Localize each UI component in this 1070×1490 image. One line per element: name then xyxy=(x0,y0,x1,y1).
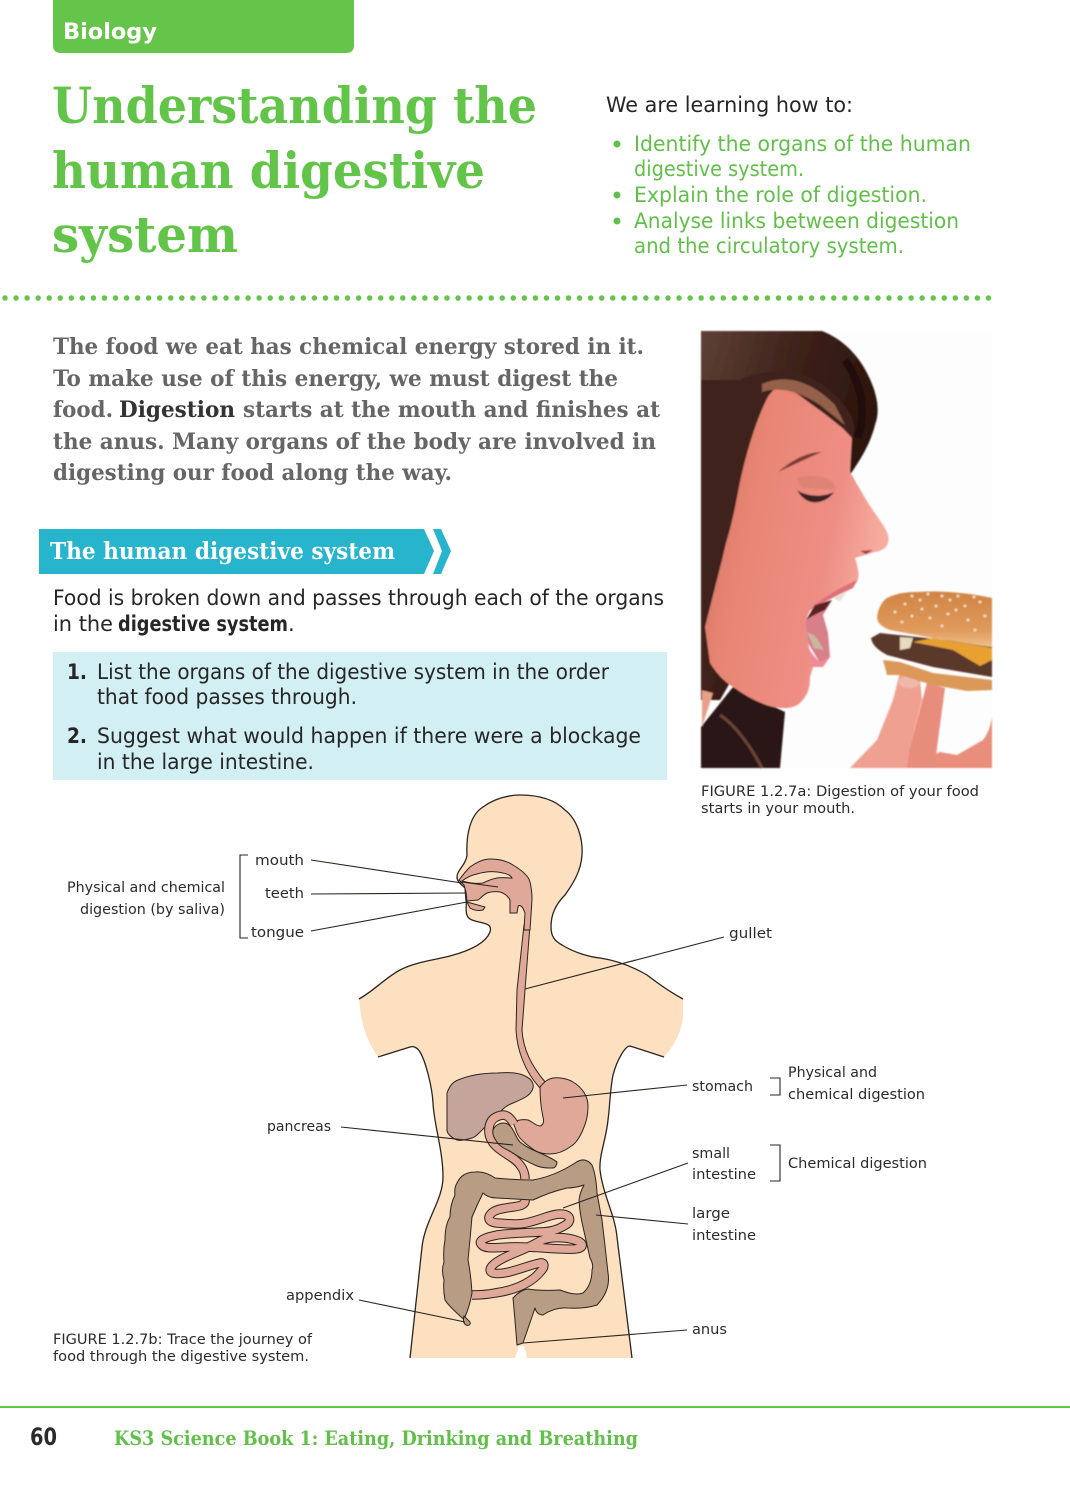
diagram labels: small xyxy=(692,1146,730,1162)
intro text block: digesting our food along the way. xyxy=(53,460,452,486)
stomach xyxy=(513,1078,588,1154)
tab: Biology: Biology xyxy=(63,20,157,45)
learning objectives: Identify the organs of the human xyxy=(634,132,971,156)
digestive system diagram xyxy=(67,795,927,1358)
gullet xyxy=(516,925,546,1088)
diagram labels: Physical and chemical xyxy=(67,880,225,896)
caption: figure a: FIGURE 1.2.7a: Digestion of your food xyxy=(701,784,979,800)
diagram labels: stomach xyxy=(692,1079,753,1095)
diagram labels: Physical and xyxy=(788,1065,877,1081)
diagram labels: Chemical digestion xyxy=(788,1156,927,1172)
leader lines xyxy=(240,855,780,1343)
index finger xyxy=(850,672,922,768)
title: Understanding the xyxy=(52,76,537,135)
intro text block xyxy=(53,334,661,486)
learning objectives xyxy=(606,93,971,258)
intro text block: the anus. Many organs of the body are involved in xyxy=(53,429,656,455)
back hair xyxy=(701,331,878,700)
caption: figure a xyxy=(701,784,979,817)
second finger xyxy=(905,683,945,768)
diagram labels: intestine xyxy=(692,1228,756,1244)
diagram labels xyxy=(67,853,927,1338)
section banner xyxy=(39,529,451,574)
small intestine xyxy=(472,1199,582,1295)
pancreas xyxy=(493,1123,557,1168)
brow xyxy=(778,452,822,472)
questions box: 2. xyxy=(67,724,87,748)
body outline xyxy=(359,795,683,1358)
neck xyxy=(702,690,713,727)
footer: KS3 Science Book 1: Eating, Drinking and Breathing xyxy=(114,1426,638,1450)
caption: figure b: FIGURE 1.2.7b: Trace the journey of xyxy=(53,1332,313,1348)
burger patty xyxy=(871,633,992,677)
nostril xyxy=(860,550,873,554)
tab: Biology xyxy=(53,0,354,53)
body xyxy=(359,795,683,1358)
intro text block: food. xyxy=(53,397,113,423)
learning objectives: and the circulatory system. xyxy=(634,234,904,258)
intro text block: starts at the mouth and finishes at xyxy=(243,397,661,423)
intro text block: The food we eat has chemical energy stored in it. xyxy=(53,334,644,360)
footer xyxy=(0,1406,1070,1451)
paragraph xyxy=(53,586,664,636)
diagram labels: intestine xyxy=(692,1167,756,1183)
caption: figure b xyxy=(53,1332,313,1365)
diagram labels: chemical digestion xyxy=(788,1087,925,1103)
hair strip beside face xyxy=(701,372,854,693)
sesame xyxy=(894,593,986,631)
learning objectives: We are learning how to: xyxy=(606,93,853,117)
nasal passage xyxy=(462,872,512,883)
teeth xyxy=(833,592,847,601)
diagram labels: mouth xyxy=(255,853,304,869)
diagram labels: pancreas xyxy=(267,1119,331,1135)
cheese xyxy=(913,638,992,666)
paragraph: in the xyxy=(53,612,113,636)
caption: figure b: food through the digestive system. xyxy=(53,1349,309,1365)
third finger and palm xyxy=(905,717,992,768)
appendix xyxy=(463,1316,470,1325)
fingernail xyxy=(898,676,920,688)
questions box: Suggest what would happen if there were a blockage xyxy=(97,724,641,748)
hair highlight xyxy=(762,379,845,425)
questions box: 1. xyxy=(67,660,87,684)
large intestine xyxy=(442,1160,609,1345)
tongue line xyxy=(462,882,498,887)
title: system xyxy=(52,205,238,264)
intro text block: Digestion xyxy=(119,397,235,423)
lower hair xyxy=(701,687,785,768)
liver xyxy=(447,1073,533,1140)
diagram labels: tongue xyxy=(251,925,304,941)
duodenum xyxy=(489,1115,525,1179)
burger bottom bun xyxy=(883,660,992,691)
paragraph: Food is broken down and passes through each of the organs xyxy=(53,586,664,610)
lower lobe xyxy=(467,902,485,910)
eye xyxy=(797,490,834,502)
diagram labels: gullet xyxy=(729,926,772,942)
learning objectives: Analyse links between digestion xyxy=(634,209,959,233)
learning objectives: digestive system. xyxy=(634,157,804,181)
diagram labels: appendix xyxy=(286,1288,354,1304)
mouth and throat xyxy=(459,859,532,930)
caption: figure a: starts in your mouth. xyxy=(701,801,855,817)
upper lip xyxy=(808,580,857,612)
paragraph: digestive system xyxy=(118,612,288,636)
footer: 60 xyxy=(30,1423,57,1451)
questions box: that food passes through. xyxy=(97,685,357,709)
intro text block: To make use of this energy, we must digest the xyxy=(53,366,618,392)
title: human digestive xyxy=(52,141,485,200)
diagram labels: digestion (by saliva) xyxy=(80,902,225,918)
mouth interior xyxy=(805,600,832,663)
photo: woman about to eat a burger xyxy=(701,331,992,768)
section banner: The human digestive system xyxy=(50,538,395,565)
diagram labels: large xyxy=(692,1206,730,1222)
face xyxy=(705,382,888,708)
questions box xyxy=(53,652,667,780)
learning objectives: Explain the role of digestion. xyxy=(634,183,927,207)
questions box: in the large intestine. xyxy=(97,750,314,774)
title xyxy=(52,76,537,264)
paragraph: . xyxy=(288,612,295,636)
diagram labels: teeth xyxy=(265,886,304,902)
diagram labels: anus xyxy=(692,1322,727,1338)
lower lip xyxy=(805,640,830,667)
top bun xyxy=(877,591,992,647)
onion xyxy=(900,637,913,650)
questions box: List the organs of the digestive system in the order xyxy=(97,660,609,684)
